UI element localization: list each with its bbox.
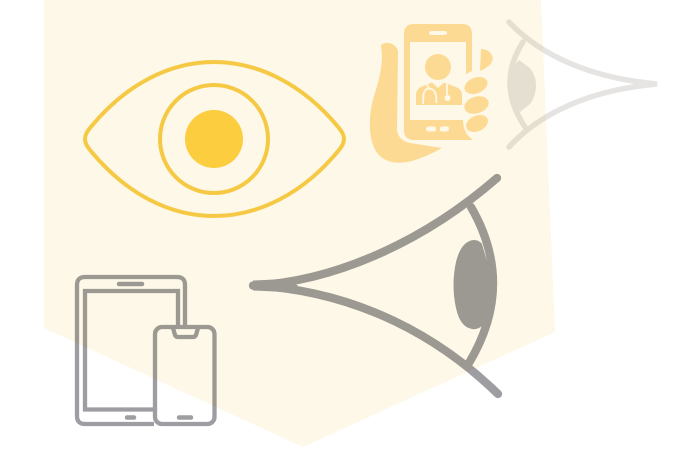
icon: faded grey eye facing right [509, 22, 657, 147]
tablet [77, 277, 185, 424]
fingers [462, 74, 490, 97]
icon: large grey eye facing left [253, 178, 498, 394]
icon: tablet and smartphone [77, 277, 214, 424]
icon: hand holding phone with doctor [370, 24, 493, 163]
doctor body with stethoscope [416, 82, 462, 105]
icon: yellow outline eye [85, 62, 344, 216]
smartphone [155, 327, 214, 424]
doctor head [425, 54, 451, 80]
lid tip and pupil [253, 240, 494, 329]
hand palm [370, 43, 442, 163]
background pentagon panel [44, 0, 555, 447]
phone body [404, 24, 473, 140]
